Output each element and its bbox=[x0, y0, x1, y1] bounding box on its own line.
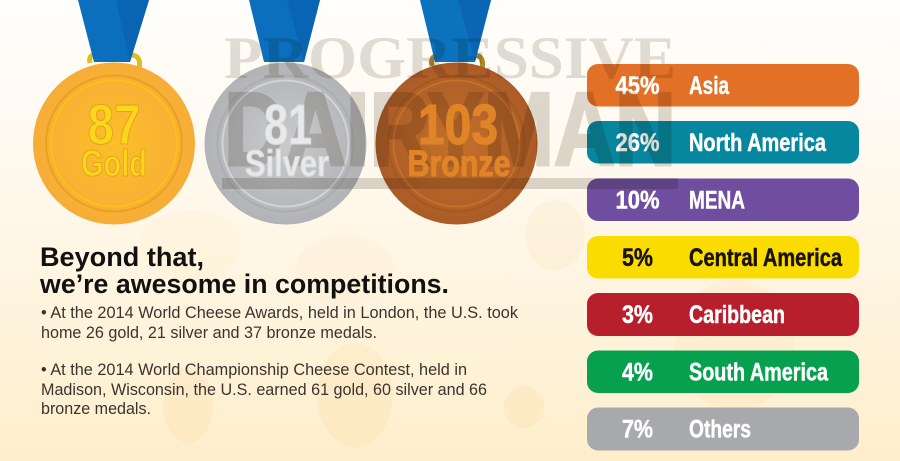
text block: World Cheese Awards: • At the 2014 World Cheese Awards, held in London, the U.S. took bbox=[41, 303, 518, 322]
medal label: 87 Gold: Gold bbox=[81, 143, 147, 184]
bar: North America 26%: North America bbox=[689, 129, 827, 157]
medal: silver bbox=[204, 62, 366, 224]
medal: gold bbox=[33, 62, 195, 224]
ribbon: silver medal bbox=[249, 0, 320, 62]
medal label: 87 Gold: 87 bbox=[88, 93, 140, 157]
heading: we’re awesome in competitions. bbox=[39, 269, 449, 299]
heading: Beyond that, bbox=[40, 242, 204, 272]
medal label: 81 Silver: 81 bbox=[264, 93, 312, 157]
text block: World Championship Cheese Contest: Madison, Wisconsin, the U.S. earned 61 gold, 60 silver and 66 bbox=[41, 380, 487, 399]
ribbon: bronze medal bbox=[420, 0, 491, 62]
bar: North America 26% bbox=[587, 121, 859, 164]
bar: MENA 10%: 10% bbox=[616, 186, 660, 214]
bar: Central America 5%: 5% bbox=[622, 244, 653, 272]
text block: World Cheese Awards bbox=[41, 303, 518, 342]
ribbon clips bbox=[90, 54, 483, 69]
bar: Central America 5% bbox=[587, 236, 859, 278]
bar: Asia 45%: 45% bbox=[616, 72, 660, 100]
medal: bronze bbox=[376, 62, 538, 224]
watermark: Progressive Dairyman bbox=[222, 25, 678, 189]
watermark: Progressive Dairyman: DAIRYMAN bbox=[224, 72, 676, 188]
bar: Central America 5%: Central America bbox=[689, 244, 843, 272]
heading bbox=[39, 242, 449, 299]
medal label: 103 Bronze bbox=[408, 93, 510, 184]
bar: Others 7%: 7% bbox=[622, 416, 653, 444]
medal label: 103 Bronze: 103 bbox=[418, 93, 498, 157]
medal label: 81 Silver bbox=[245, 93, 329, 184]
bar: Others 7% bbox=[587, 408, 859, 450]
bar: Asia 45% bbox=[587, 64, 859, 106]
bar: North America 26%: 26% bbox=[616, 129, 660, 157]
watermark: Progressive Dairyman: PROGRESSIVE bbox=[224, 25, 676, 91]
bar: MENA 10%: MENA bbox=[689, 186, 745, 214]
bar: South America 4%: South America bbox=[689, 358, 829, 386]
text block: World Championship Cheese Contest bbox=[41, 360, 487, 418]
text block: World Championship Cheese Contest: bronze medals. bbox=[41, 399, 151, 418]
bar: Others 7%: Others bbox=[689, 416, 751, 444]
bar: Caribbean 3%: Caribbean bbox=[689, 301, 785, 329]
bar: Caribbean 3% bbox=[587, 293, 859, 336]
medal label: 87 Gold bbox=[81, 93, 147, 184]
medal label: 103 Bronze: Bronze bbox=[408, 143, 510, 184]
bar: Caribbean 3%: 3% bbox=[622, 301, 653, 329]
bar: MENA 10% bbox=[587, 178, 859, 221]
bar: South America 4% bbox=[587, 350, 859, 393]
bar: Asia 45%: Asia bbox=[689, 72, 730, 100]
text block: World Championship Cheese Contest: • At the 2014 World Championship Cheese Contest, held in bbox=[41, 360, 467, 379]
text block: World Cheese Awards: home 26 gold, 21 silver and 37 bronze medals. bbox=[41, 323, 377, 342]
ribbon: gold medal bbox=[78, 0, 149, 62]
cheese bubbles bbox=[140, 200, 795, 447]
medal label: 81 Silver: Silver bbox=[245, 143, 329, 184]
bar: South America 4%: 4% bbox=[622, 358, 653, 386]
